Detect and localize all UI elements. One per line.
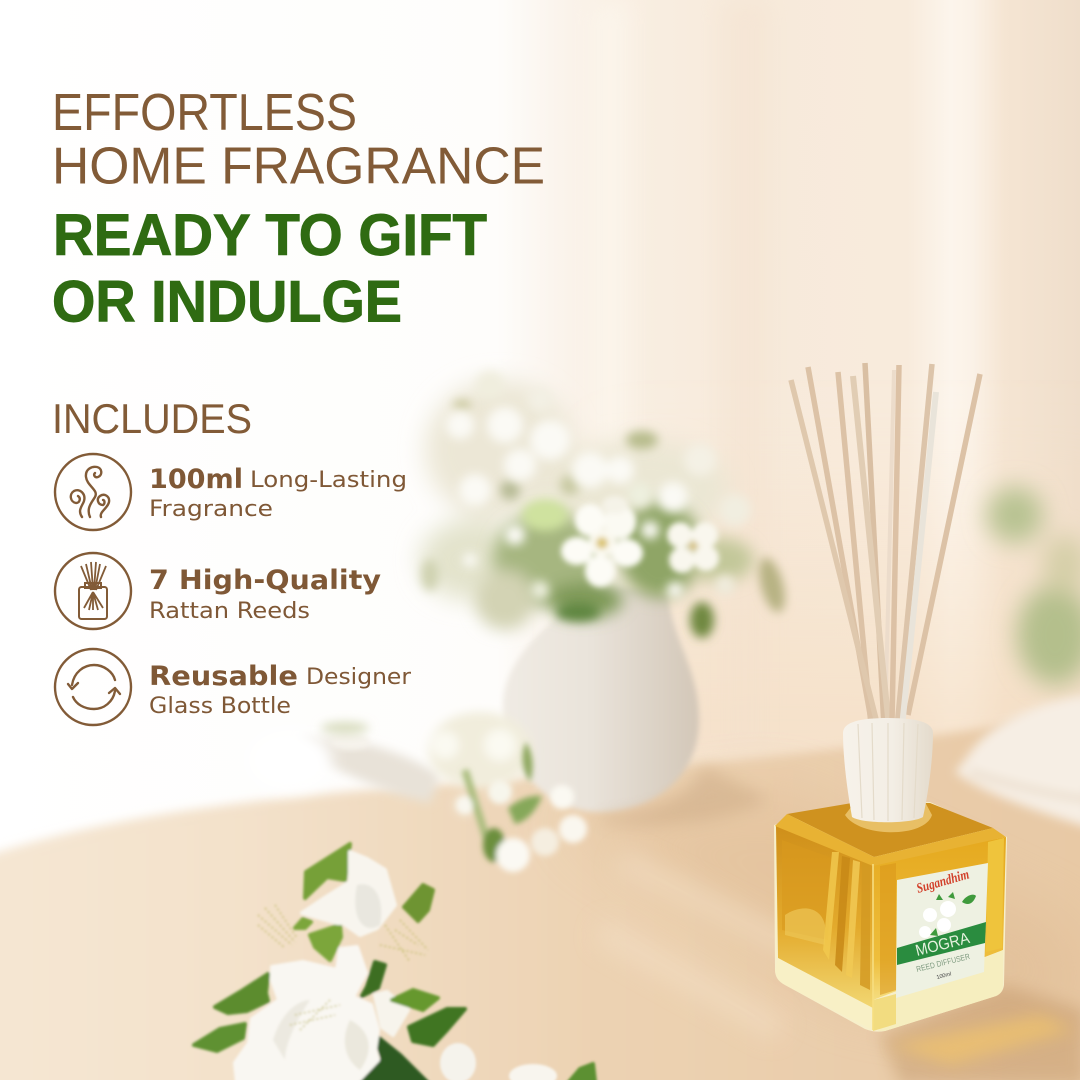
glass highlights (775, 958, 873, 1030)
white vase (503, 588, 699, 812)
feature: 7 high-quality rattan reeds: 7 High-Quality (149, 565, 381, 596)
blurred flower bouquet (420, 371, 790, 638)
feature: reusable designer glass bottle: Reusable (149, 661, 298, 692)
headline: effortless home fragrance: EFFORTLESS (52, 84, 357, 142)
bottle glass (774, 802, 1007, 1032)
petal shading (355, 884, 381, 928)
feature: 7 high-quality rattan reeds: Rattan Reeds (149, 599, 310, 624)
feature: 100ml long-lasting fragrance: Long-Lasting (250, 468, 407, 493)
reeds seen through the glass (823, 852, 870, 990)
wooden table (0, 705, 1080, 1080)
reeds (791, 363, 980, 727)
product: reed diffuser bottle (774, 363, 1007, 1032)
right white flower (667, 522, 719, 573)
blurred fallen blossoms (248, 712, 587, 872)
right leaves over petals (392, 990, 438, 1010)
headline: effortless home fragrance (52, 84, 545, 196)
feature: reusable designer glass bottle: Designer (306, 665, 412, 690)
feature: 100ml long-lasting fragrance (149, 464, 407, 522)
feature: 100ml long-lasting fragrance: 100ml (149, 464, 243, 495)
folded towel (955, 695, 1080, 828)
bottle label: 100ml (936, 971, 952, 981)
icon: fragrance swirls (55, 454, 131, 530)
label flowers (919, 892, 976, 938)
white petals (302, 852, 395, 935)
feature: 100ml long-lasting fragrance: Fragrance (149, 497, 273, 522)
vase shadow on table (600, 765, 770, 826)
bottle label (896, 863, 988, 998)
headline: ready to gift or indulge: OR INDULGE (52, 270, 402, 334)
green core (475, 502, 754, 630)
feature: 7 high-quality rattan reeds (149, 565, 381, 624)
bottle label: REED DIFFUSER (915, 952, 971, 974)
background: distant blurred plant (987, 487, 1080, 685)
bottle label: Sugandhim (915, 868, 971, 897)
bottle liquid right face (873, 837, 1006, 1000)
foreground white blossoms (194, 844, 595, 1080)
headline: ready to gift or indulge: READY TO GIFT (53, 203, 487, 268)
icon: reed diffuser (55, 553, 131, 629)
icon: reuse arrows (55, 649, 131, 725)
feature: reusable designer glass bottle (149, 661, 412, 719)
headline: effortless home fragrance: HOME FRAGRANCE (52, 138, 545, 196)
feature: reusable designer glass bottle: Glass Bottle (149, 694, 291, 719)
bottle label: MOGRA (914, 930, 972, 960)
bottle shadow (880, 985, 1080, 1080)
bottle top shoulder (787, 803, 993, 857)
leaves (305, 844, 350, 898)
main white flower (561, 496, 643, 587)
pale foliage haze (420, 380, 730, 600)
headline: ready to gift or indulge (52, 203, 487, 334)
table light reflection (890, 1015, 1075, 1065)
stamens (258, 905, 428, 1030)
heading: includes: INCLUDES (52, 395, 252, 442)
white blossom clusters (446, 371, 751, 599)
bottle liquid left face (776, 826, 873, 1010)
wooden cap (843, 718, 933, 822)
